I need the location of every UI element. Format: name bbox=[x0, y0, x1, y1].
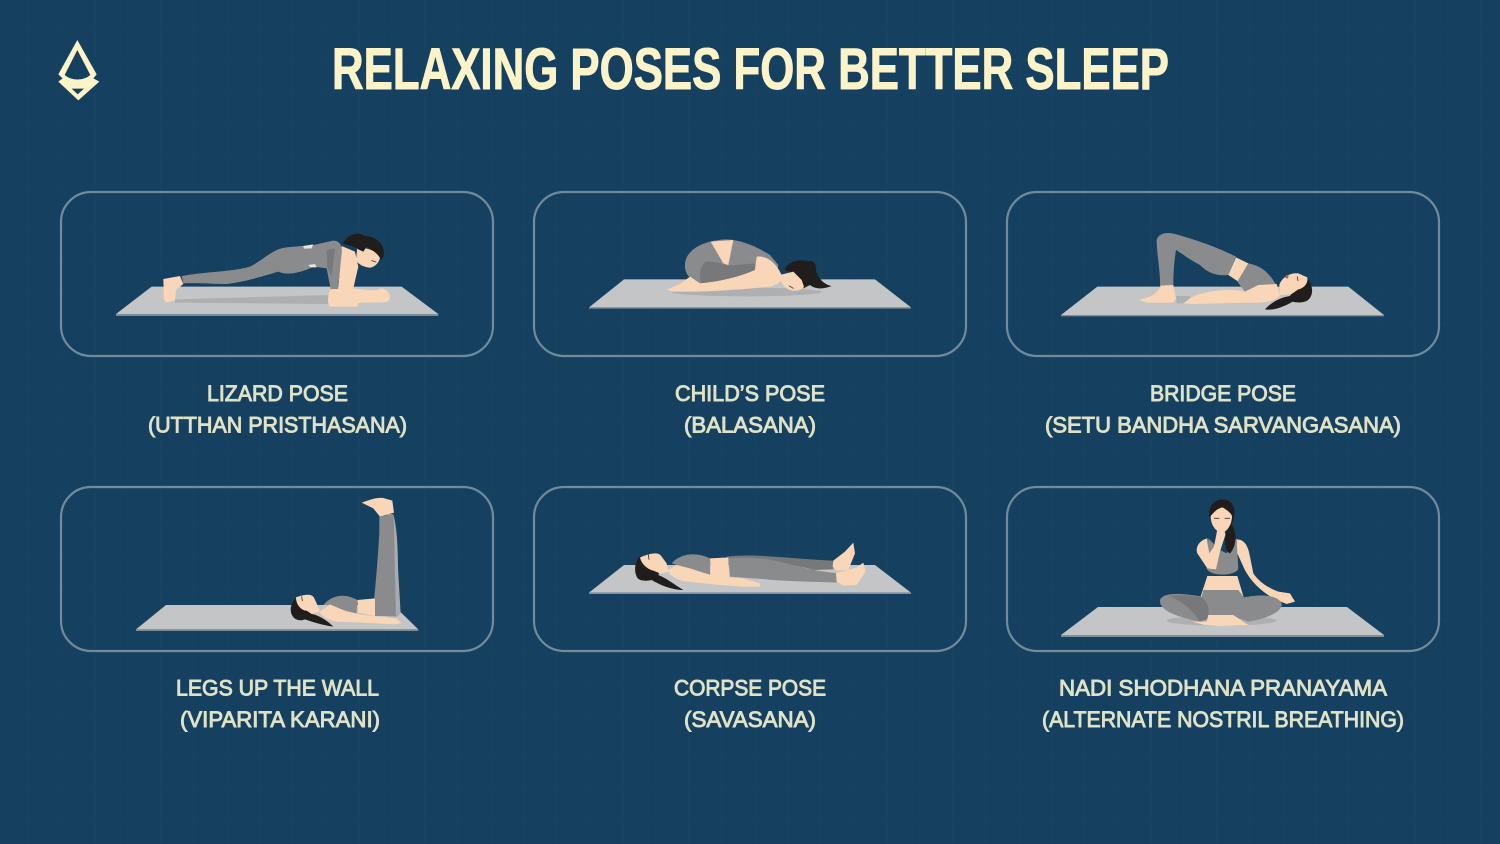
card outline bbox=[534, 487, 966, 651]
icon: logo bbox=[58, 40, 99, 100]
panel: lizard pose bbox=[61, 192, 493, 356]
panel: legs up the wall bbox=[61, 487, 493, 651]
card outline bbox=[61, 487, 493, 651]
label: lizard pose: LIZARD POSE bbox=[207, 381, 348, 406]
label: lizard pose bbox=[148, 381, 407, 438]
illustration: legs up the wall bbox=[136, 498, 418, 631]
label: corpse pose: CORPSE POSE bbox=[674, 676, 826, 700]
panel: child's pose bbox=[534, 192, 966, 356]
card outline bbox=[1007, 192, 1439, 356]
label: nadi shodhana pranayama: NADI SHODHANA PRANAYAMA bbox=[1059, 676, 1387, 700]
label: legs up the wall bbox=[176, 676, 380, 732]
illustration: bridge pose bbox=[1061, 233, 1384, 316]
label: child's pose: (BALASANA) bbox=[684, 412, 816, 438]
title: RELAXING POSES FOR BETTER SLEEP bbox=[332, 37, 1169, 102]
label: nadi shodhana pranayama: (ALTERNATE NOSTRIL BREATHING) bbox=[1042, 707, 1404, 732]
illustration: corpse pose bbox=[589, 543, 911, 594]
label: legs up the wall: (VIPARITA KARANI) bbox=[180, 707, 380, 732]
panel: bridge pose bbox=[1007, 192, 1439, 356]
label: legs up the wall: LEGS UP THE WALL bbox=[176, 676, 379, 700]
label: lizard pose: (UTTHAN PRISTHASANA) bbox=[148, 412, 407, 438]
label: child's pose bbox=[675, 381, 825, 438]
label: child's pose: CHILD’S POSE bbox=[675, 381, 825, 406]
label: bridge pose: BRIDGE POSE bbox=[1150, 381, 1296, 406]
label: corpse pose bbox=[674, 676, 826, 732]
label: nadi shodhana pranayama bbox=[1042, 676, 1404, 732]
illustration: nadi shodhana pranayama bbox=[1061, 499, 1384, 637]
illustration: lizard pose bbox=[116, 234, 438, 316]
label: corpse pose: (SAVASANA) bbox=[684, 707, 816, 732]
panel: nadi shodhana pranayama bbox=[1007, 487, 1439, 651]
panel: corpse pose bbox=[534, 487, 966, 651]
label: bridge pose bbox=[1045, 381, 1401, 438]
label: bridge pose: (SETU BANDHA SARVANGASANA) bbox=[1045, 412, 1401, 438]
card outline bbox=[1007, 487, 1439, 651]
illustration: child's pose bbox=[589, 239, 911, 309]
card outline bbox=[534, 192, 966, 356]
card outline bbox=[61, 192, 493, 356]
